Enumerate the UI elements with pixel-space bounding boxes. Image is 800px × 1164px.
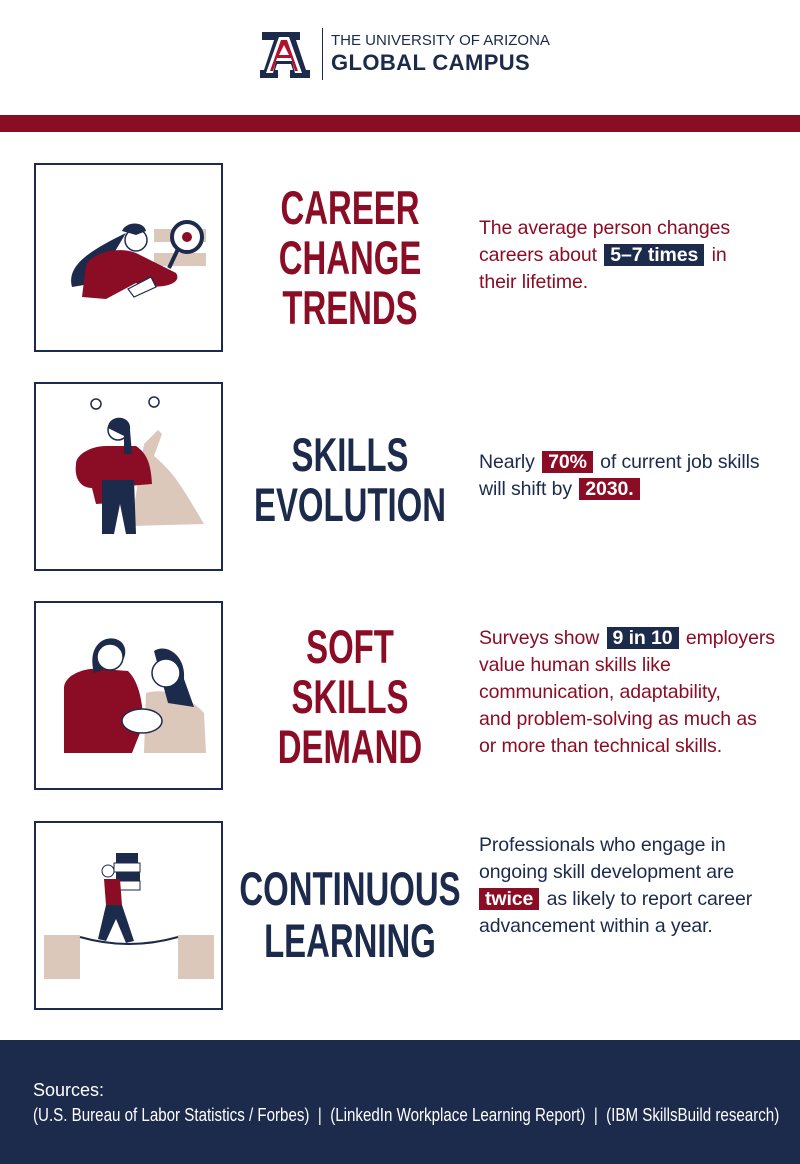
heading: [239, 862, 461, 967]
footer: sources: (U.S. Bureau of Labor Statistics / Forbes) | (LinkedIn Workplace Learning Report) | (IBM SkillsBuild research): [33, 1105, 779, 1125]
logo text: [331, 32, 550, 75]
text block: [479, 451, 760, 500]
text block: and problem-solving as much as: [479, 708, 757, 730]
text block: communication, adaptability,: [479, 681, 721, 703]
text block: The average person changes: [479, 217, 730, 239]
panel: skills evolution: [34, 382, 760, 571]
text block: Surveys show 9 in 10 employers: [479, 627, 775, 649]
panel: continuous learning: [34, 821, 752, 1010]
heading: EVOLUTION: [254, 478, 446, 531]
illustration: celebrating woman: [34, 382, 223, 571]
heading: [254, 428, 446, 531]
illustration: person balancing on rope with books: [34, 821, 223, 1010]
heading: CHANGE: [279, 231, 421, 284]
heading: [278, 620, 422, 773]
panel: career change trends: [34, 163, 730, 352]
panel: soft skills demand: [34, 601, 775, 790]
footer: sources: [0, 1040, 800, 1164]
heading: SOFT: [306, 620, 394, 673]
text block: [479, 217, 730, 293]
heading: TRENDS: [282, 281, 418, 334]
text block: Professionals who engage in: [479, 834, 726, 856]
heading: CAREER: [281, 181, 419, 234]
footer: sources: Sources:: [33, 1080, 104, 1100]
header logo: [260, 28, 550, 80]
heading: DEMAND: [278, 720, 422, 773]
logo text: GLOBAL CAMPUS: [331, 50, 530, 75]
text block: will shift by 2030.: [479, 478, 634, 500]
text block: or more than technical skills.: [479, 735, 722, 757]
illustration: two people holding hands: [34, 601, 223, 790]
text block: [479, 834, 752, 937]
text block: value human skills like: [479, 654, 671, 676]
logo text: THE UNIVERSITY OF ARIZONA: [331, 32, 550, 49]
illustration: woman with magnifier: [34, 163, 223, 352]
heading: CONTINUOUS: [239, 862, 461, 915]
heading: [279, 181, 421, 334]
heading: SKILLS: [292, 428, 408, 481]
text block: [479, 627, 775, 757]
text block: careers about 5–7 times in: [479, 244, 727, 266]
text block: their lifetime.: [479, 271, 588, 293]
text block: advancement within a year.: [479, 915, 713, 937]
heading: LEARNING: [264, 914, 436, 967]
text block: Nearly 70% of current job skills: [479, 451, 760, 473]
heading: SKILLS: [292, 670, 408, 723]
text block: twice as likely to report career: [485, 888, 752, 910]
red bar: [0, 115, 800, 132]
icon: A logo: [260, 32, 310, 78]
text block: ongoing skill development are: [479, 861, 734, 883]
